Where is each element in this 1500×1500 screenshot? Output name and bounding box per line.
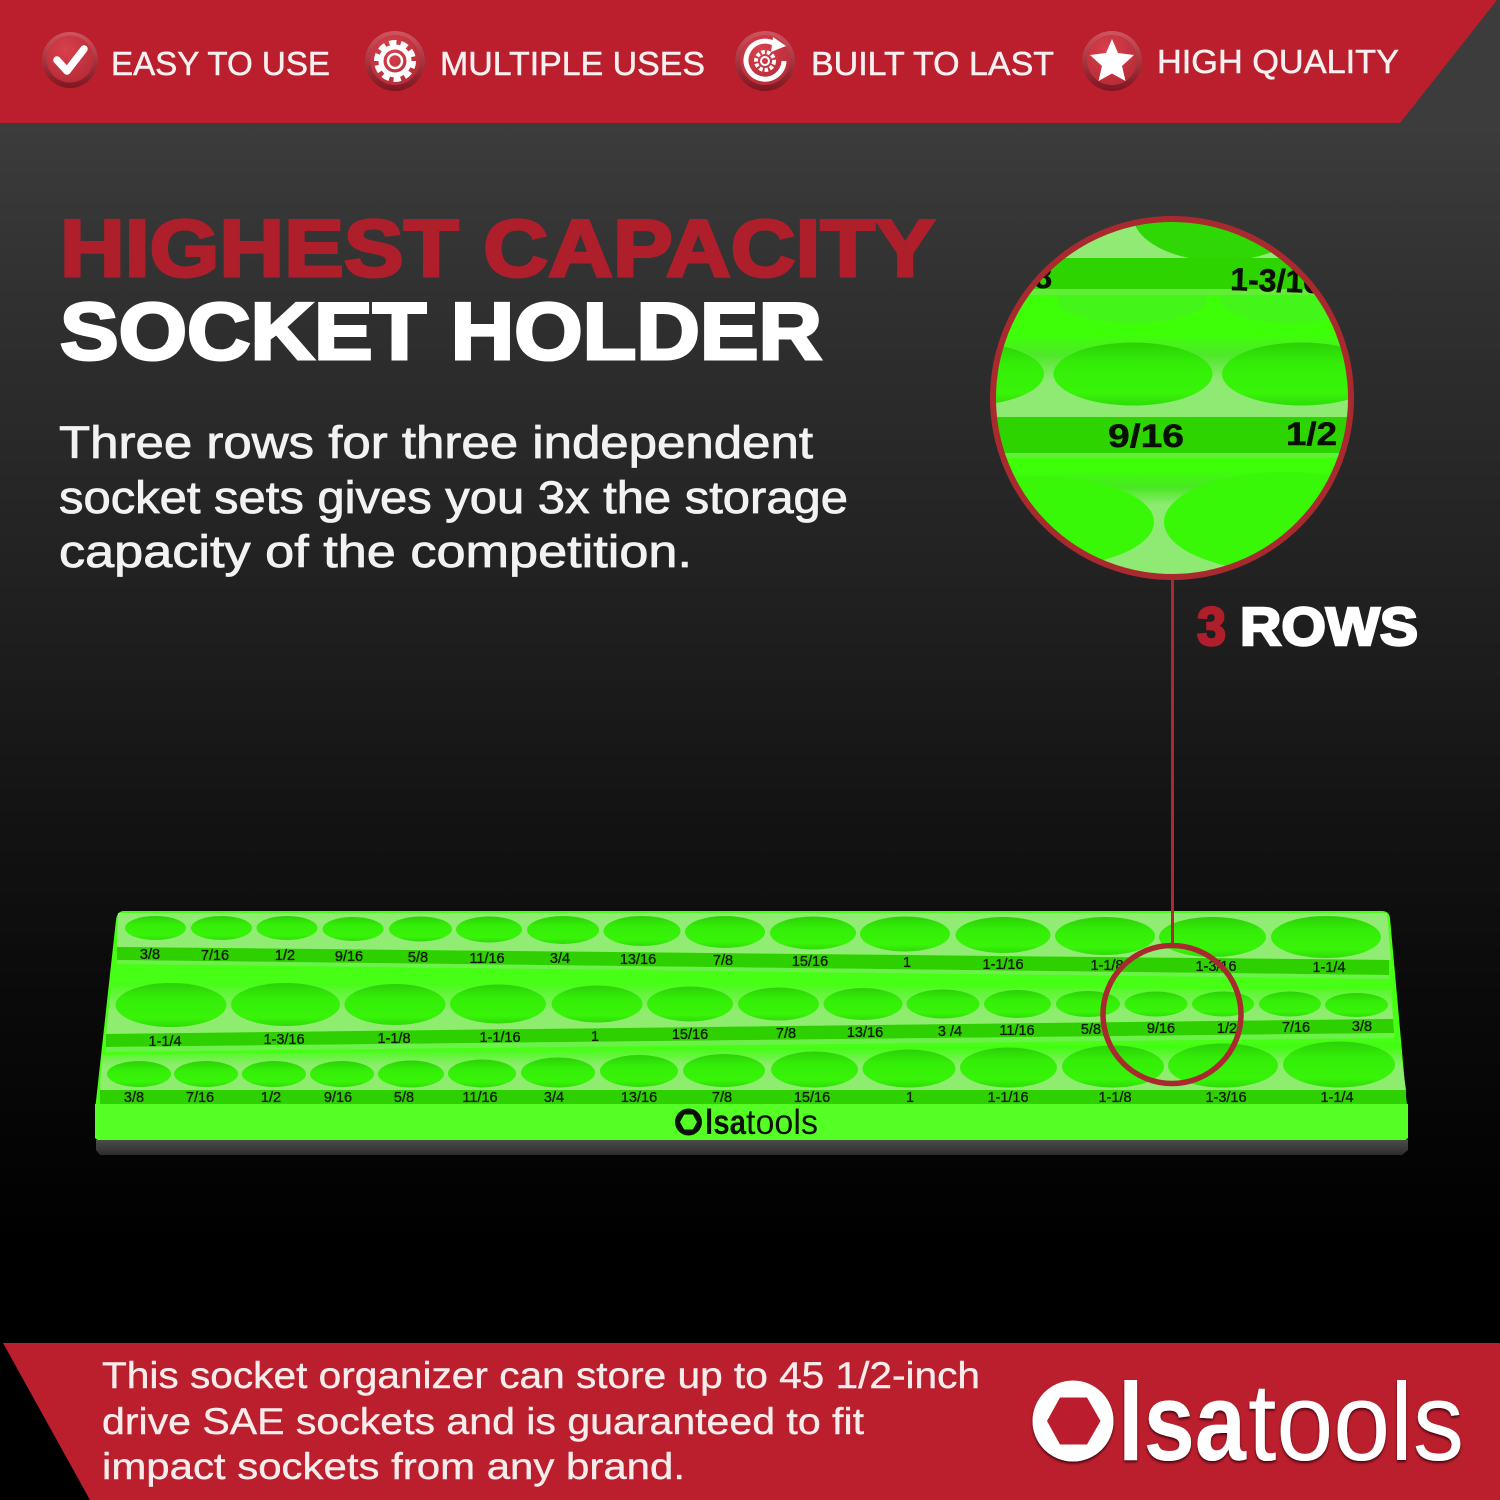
tier 2 size labels: 5/8 <box>1081 1022 1101 1038</box>
product: socket tray <box>95 911 1408 1155</box>
top banner <box>0 0 1497 123</box>
callout: magnified view: 1-1/8 <box>979 259 1052 295</box>
tier 3 holes <box>107 1042 1395 1088</box>
tier 1 size labels: 3/4 <box>550 951 570 967</box>
tier 3 size labels: 1-1/8 <box>1098 1090 1132 1106</box>
callout: magnified view: 1-3/16 <box>1230 261 1322 300</box>
brand logo: lsa <box>1118 1361 1247 1484</box>
heading line: highest capacity: HIGHEST CAPACITY <box>60 204 935 294</box>
tier 2 size labels: 1/2 <box>1217 1021 1237 1037</box>
callout: magnified view: 1/2 <box>1286 416 1337 452</box>
tier 3 size labels: 9/16 <box>324 1090 352 1106</box>
brand logo: tools <box>1248 1361 1464 1484</box>
tier 2 size labels: 3 /4 <box>938 1024 962 1040</box>
icon: check <box>42 32 98 88</box>
label: easy to use: EASY TO USE <box>111 45 330 82</box>
icon: rotating gear <box>735 31 795 91</box>
tier 2 size labels: 7/16 <box>1282 1020 1310 1036</box>
tier 3 size labels: 13/16 <box>621 1090 657 1106</box>
callout: magnified view: 9/16 <box>1108 418 1184 454</box>
tier 1 size labels: 3/8 <box>140 947 160 963</box>
bottom banner <box>3 1343 1500 1500</box>
tier 2 size labels <box>148 1019 1372 1050</box>
tier 3 size labels: 5/8 <box>394 1090 414 1106</box>
tier 1 size labels: 1/2 <box>275 948 295 964</box>
tier 2 surface <box>106 982 1393 1034</box>
tier 3 size labels <box>124 1090 1354 1106</box>
tray logo: tools <box>746 1103 818 1142</box>
tray body <box>95 911 1408 1140</box>
callout: magnified view <box>990 216 1354 580</box>
tier 1 size labels: 15/16 <box>792 954 828 970</box>
tier 1 size labels: 13/16 <box>620 952 656 968</box>
icon: star <box>1082 31 1142 91</box>
banner text: This socket organizer can store up to 45 1/2-inch <box>102 1355 980 1396</box>
callout label: 3 rows: ROWS <box>1240 597 1418 657</box>
label: multiple uses: MULTIPLE USES <box>440 45 705 82</box>
tier 3 size labels: 15/16 <box>794 1090 830 1106</box>
callout label: 3 rows: 3 <box>1197 597 1226 657</box>
tier 2 size labels: 1-1/4 <box>148 1034 182 1050</box>
tier 1 size labels: 7/16 <box>201 948 229 964</box>
tier 2 holes <box>116 983 1388 1027</box>
banner text: impact sockets from any brand. <box>102 1446 685 1487</box>
tier 2 size labels: 11/16 <box>999 1023 1035 1039</box>
tier 2 size labels: 1-3/16 <box>263 1032 305 1048</box>
tray logo: lsa <box>705 1103 746 1142</box>
tier 2 size labels: 15/16 <box>672 1027 708 1043</box>
heading <box>60 204 935 377</box>
banner text <box>102 1355 980 1487</box>
tier 3 size labels: 7/8 <box>712 1090 732 1106</box>
tier 1 size labels: 1-1/16 <box>982 957 1024 973</box>
tier 2 size labels: 1-1/8 <box>377 1031 411 1047</box>
description text: capacity of the competition. <box>59 526 692 577</box>
label: high quality: HIGH QUALITY <box>1157 43 1399 80</box>
tier 3 size labels: 3/8 <box>124 1090 144 1106</box>
tier 3 surface <box>100 1042 1406 1090</box>
tier 3 size labels: 1-1/4 <box>1320 1090 1354 1106</box>
tier 3 size labels: 7/16 <box>186 1090 214 1106</box>
description text: Three rows for three independent <box>59 417 814 468</box>
tier 3 size labels: 3/4 <box>544 1090 564 1106</box>
tier 2 label strip <box>106 1019 1394 1047</box>
label: built to last: BUILT TO LAST <box>811 45 1054 82</box>
tier 3 label strip <box>100 1090 1406 1104</box>
tier 1 size labels: 1-1/4 <box>1312 960 1346 976</box>
tier 2 size labels: 1-1/16 <box>479 1030 521 1046</box>
tier 3 size labels: 1 <box>906 1090 914 1106</box>
tier 3 size labels: 1-3/16 <box>1205 1090 1247 1106</box>
tier 1 label strip <box>117 947 1389 975</box>
tier 1 size labels <box>140 947 1346 976</box>
tier 2 size labels: 1 <box>591 1029 599 1045</box>
heading line: socket holder: SOCKET HOLDER <box>60 287 822 377</box>
tray logo <box>675 1103 818 1142</box>
banner text: drive SAE sockets and is guaranteed to fit <box>102 1401 865 1442</box>
tier 1 size labels: 1-1/8 <box>1090 958 1124 974</box>
tier 3 size labels: 1/2 <box>261 1090 281 1106</box>
tray base <box>96 1140 1408 1155</box>
tier 2 size labels: 13/16 <box>847 1025 883 1041</box>
tier 1 size labels: 7/8 <box>713 953 733 969</box>
icon: gear <box>365 31 425 91</box>
tier 3 size labels: 1-1/16 <box>987 1090 1029 1106</box>
brand logo <box>1032 1361 1464 1484</box>
tier 1 holes <box>125 916 1381 958</box>
tier 1 size labels: 5/8 <box>408 950 428 966</box>
tier 1 size labels: 1-3/16 <box>1195 959 1237 975</box>
tray front face <box>95 1104 1408 1140</box>
tier 1 size labels: 11/16 <box>469 951 505 967</box>
tier 2 size labels: 9/16 <box>1147 1021 1175 1037</box>
tier 3 size labels: 11/16 <box>462 1090 498 1106</box>
tier 2 size labels: 7/8 <box>776 1026 796 1042</box>
description text <box>59 417 848 577</box>
tier 1 surface <box>117 913 1391 960</box>
callout: leader line <box>1171 575 1174 945</box>
tier 1 size labels: 9/16 <box>335 949 363 965</box>
callout: small ring on tray <box>1103 946 1241 1084</box>
description text: socket sets gives you 3x the storage <box>59 472 848 523</box>
tier 2 size labels: 3/8 <box>1352 1019 1372 1035</box>
tier 1 size labels: 1 <box>903 955 911 971</box>
